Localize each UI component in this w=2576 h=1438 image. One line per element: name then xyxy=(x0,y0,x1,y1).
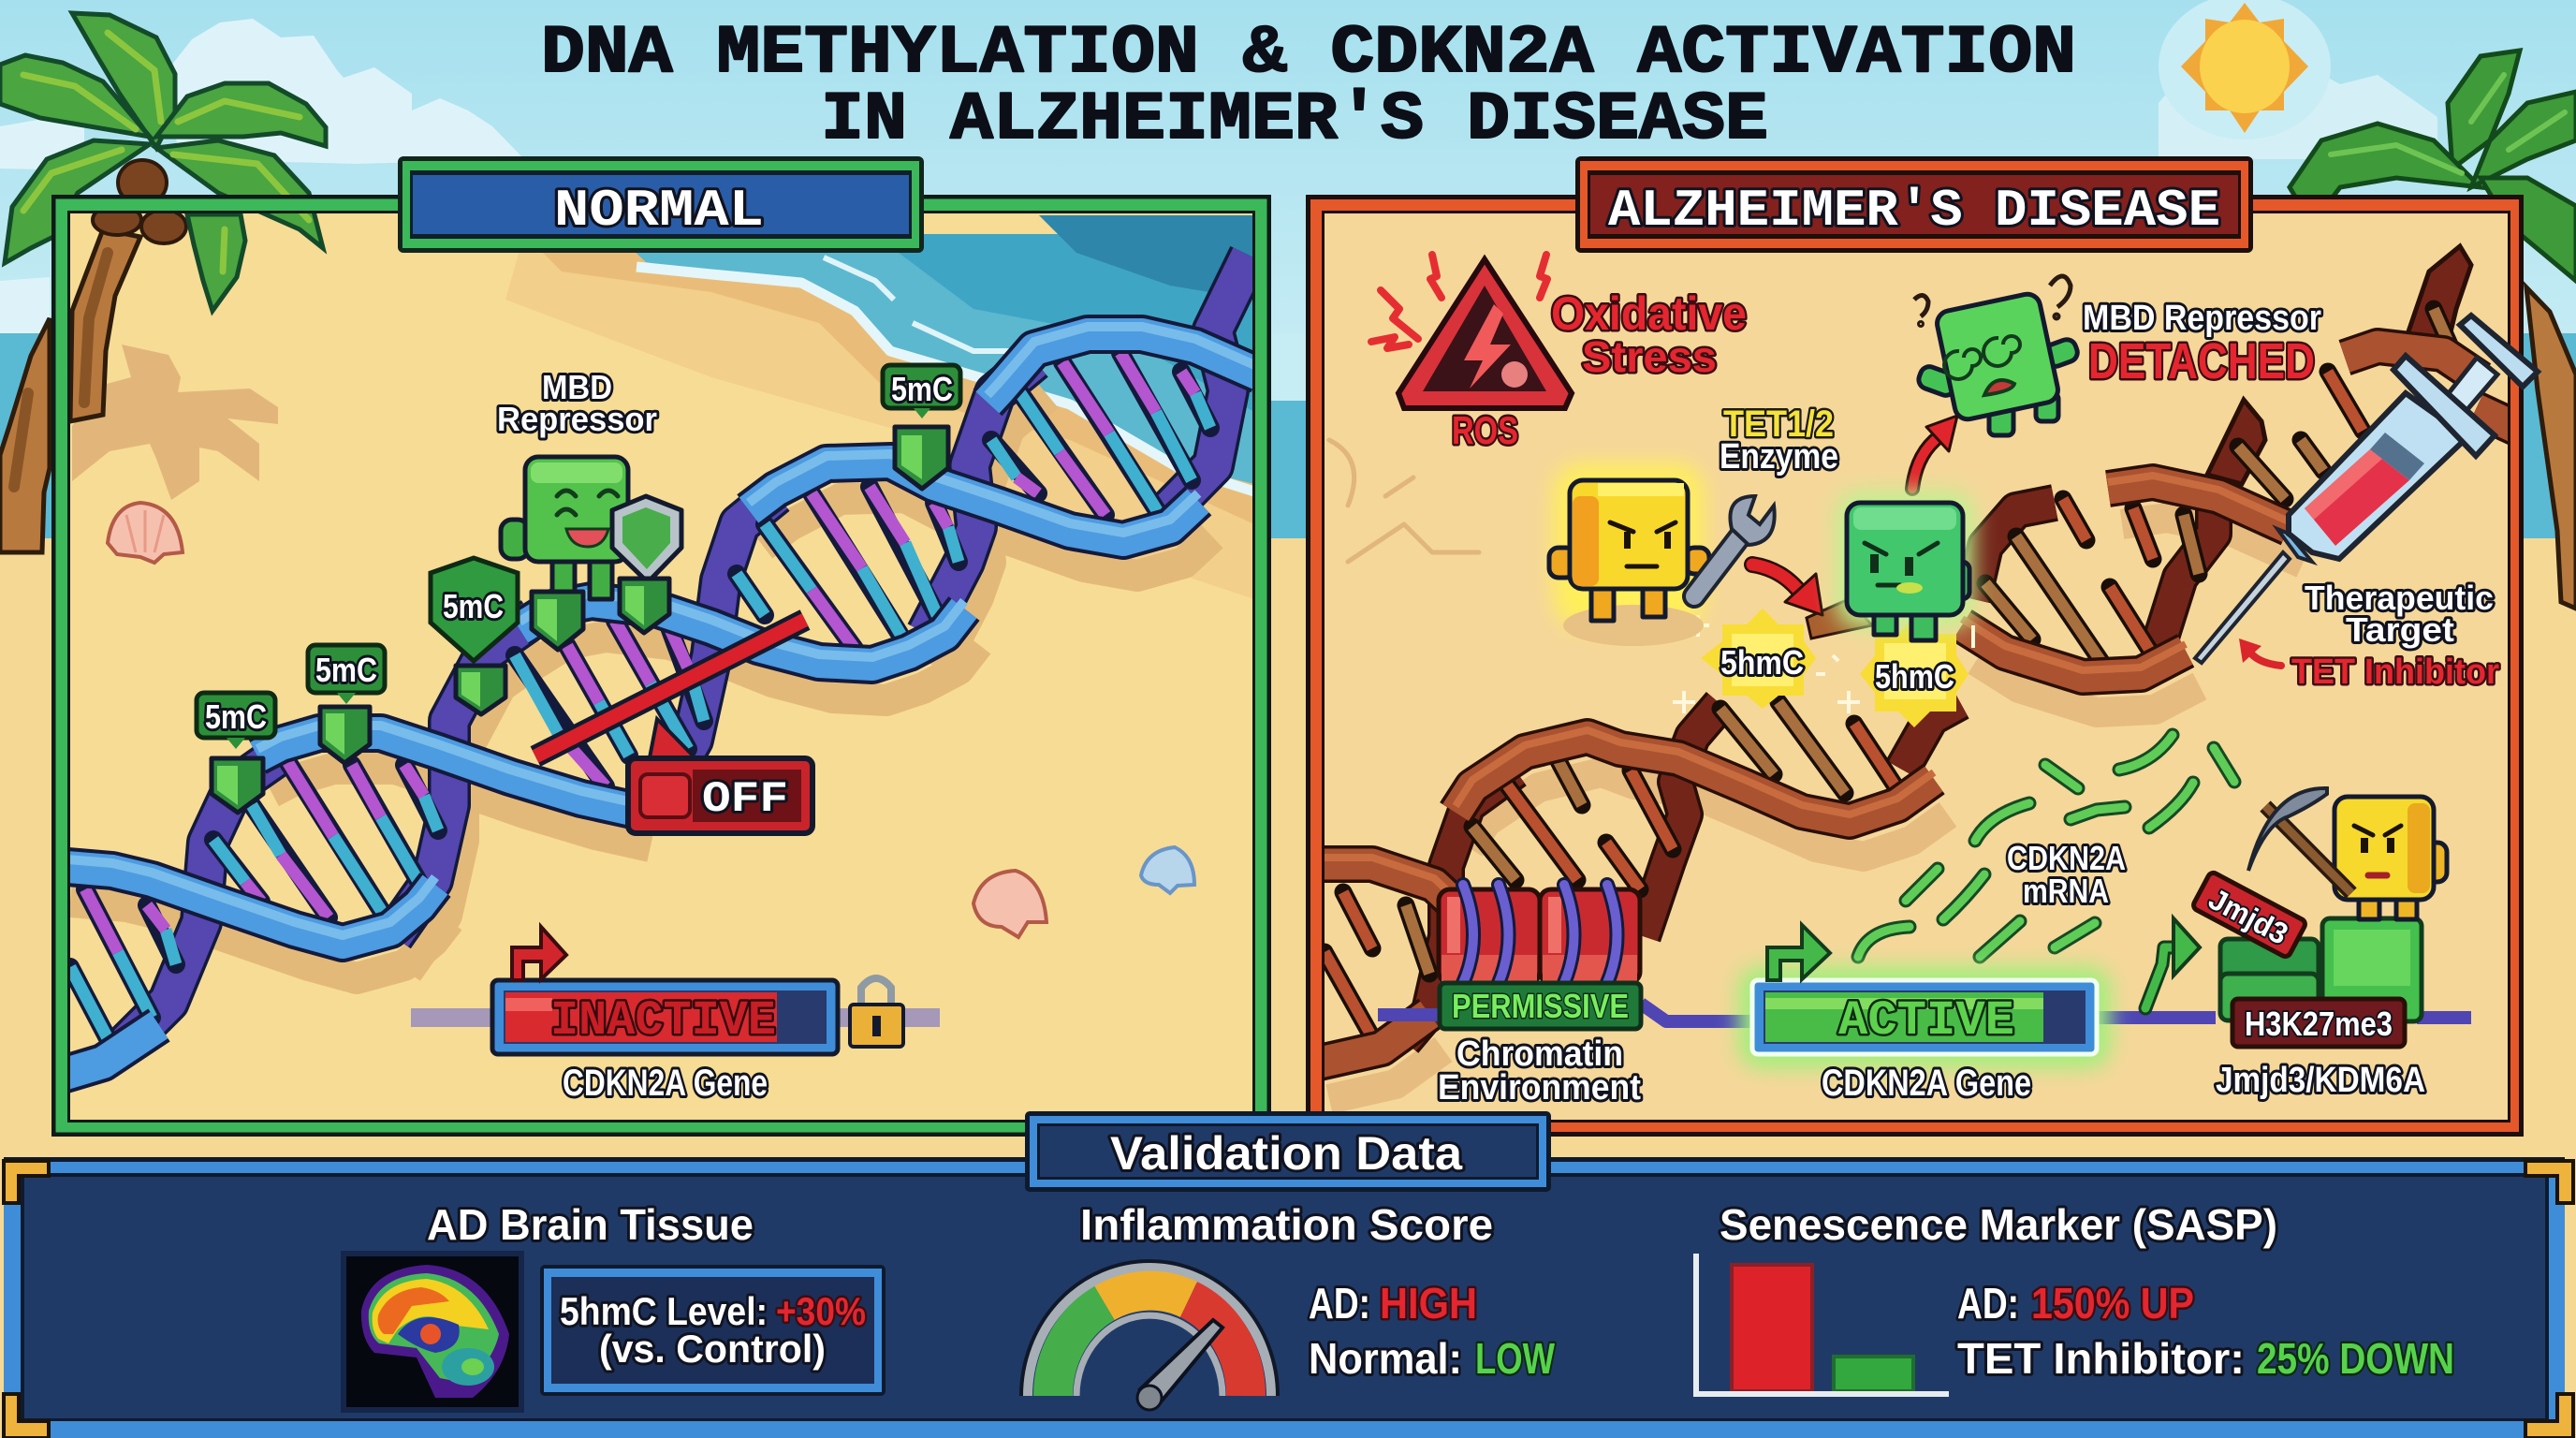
heading: AD Brain Tissue: AD Brain Tissue xyxy=(427,1200,754,1249)
warning: ROS triangle xyxy=(1371,255,1572,408)
title: IN ALZHEIMER'S DISEASE xyxy=(821,81,1768,158)
callout: 5hmC level xyxy=(540,1265,886,1396)
damaged dna: spikes xyxy=(2207,246,2471,484)
gauge: inflammation xyxy=(1025,1265,1274,1410)
label: MBD Repressor detached: MBD Repressor xyxy=(2083,299,2321,338)
panel: validation data xyxy=(4,1111,2573,1438)
label: Therapeutic Target TET Inhibitor xyxy=(2291,579,2499,692)
tag: 5mC shield large xyxy=(431,558,518,661)
title xyxy=(541,15,2076,158)
gene: CDKN2A inactive: INACTIVE xyxy=(550,993,776,1049)
label: Oxidative Stress: Stress xyxy=(1582,332,1717,381)
gene: CDKN2A active: ACTIVE xyxy=(1838,993,2014,1049)
label: 5hmC right: 5hmC xyxy=(1875,657,1954,696)
text: SASP values: AD: xyxy=(1957,1279,2019,1328)
arrow: up to detached repressor xyxy=(1912,416,1957,489)
label: MBD Repressor xyxy=(497,368,657,438)
callout: 5hmC level: 5hmC Level: xyxy=(560,1289,768,1333)
tag: 5mC left xyxy=(197,693,275,749)
label: ROS: ROS xyxy=(1452,408,1518,452)
character: Jmjd3 with pickaxe xyxy=(2248,788,2447,919)
damaged dna: back strands xyxy=(1404,496,2214,1041)
label: MBD Repressor detached xyxy=(2083,299,2321,389)
label: 5hmC left: 5hmC xyxy=(1720,643,1804,682)
arrow: inactive promoter xyxy=(512,927,566,980)
tag: normal: NORMAL xyxy=(554,181,764,241)
dna shadow xyxy=(70,396,1212,978)
gene: CDKN2A active xyxy=(1739,967,2110,1067)
tag: 5mC middle: 5mC xyxy=(315,651,377,689)
label: MBD Repressor: MBD xyxy=(542,368,612,406)
purple chromatin line xyxy=(1378,1004,2471,1021)
arrow: curved red to strand xyxy=(1752,565,1822,615)
text: SASP values: TET Inhibitor: xyxy=(1957,1334,2245,1383)
right palm tree xyxy=(2290,51,2576,609)
arrow: points at needle xyxy=(2239,638,2281,666)
gene: CDKN2A inactive xyxy=(411,980,940,1054)
mRNA strands xyxy=(1858,735,2234,957)
dna shadow xyxy=(1329,518,2303,1099)
tag: alzheimer's disease: ALZHEIMER'S DISEASE xyxy=(1608,181,2220,241)
label: Therapeutic Target TET Inhibitor: TET Inhibitor xyxy=(2291,653,2499,692)
label: Chromatin Environment: Chromatin xyxy=(1456,1034,1623,1074)
icon: star 5hmC left xyxy=(1701,609,1816,709)
text: inflammation values xyxy=(1309,1279,1555,1383)
dna helix: rungs xyxy=(70,353,1210,1058)
damaged dna: rungs xyxy=(1325,309,2452,1046)
label: Oxidative Stress xyxy=(1551,287,1747,381)
tag: validation data xyxy=(1025,1111,1551,1192)
label: TET1/2 Enzyme: Enzyme xyxy=(1720,437,1838,477)
callout: OFF switch: OFF xyxy=(702,775,788,824)
label: Chromatin Environment xyxy=(1438,1034,1641,1108)
callout: 5hmC level: (vs. Control) xyxy=(599,1327,826,1371)
label: CDKN2A Gene: CDKN2A Gene xyxy=(563,1063,768,1104)
tag: 5mC top right xyxy=(883,365,960,418)
label: MBD Repressor detached: DETACHED xyxy=(2088,333,2315,389)
tag: 5mC shield large: 5mC xyxy=(443,587,504,625)
tag: validation data: Validation Data xyxy=(1110,1127,1463,1180)
sand cracks xyxy=(1329,440,1479,562)
icon: star 5hmC right xyxy=(1860,618,1969,727)
bar chart: SASP xyxy=(1696,1254,1949,1394)
panel frame xyxy=(54,197,1269,1135)
icons: question marks xyxy=(1914,276,2071,326)
icon: padlock xyxy=(850,978,903,1047)
dna helix: back strands xyxy=(126,256,1250,1044)
damaged dna: front strands xyxy=(1315,346,2518,1064)
label: Therapeutic Target TET Inhibitor: Target xyxy=(2346,610,2454,649)
title: DNA METHYLATION & CDKN2A ACTIVATION xyxy=(541,15,2076,92)
heading: Inflammation Score: Inflammation Score xyxy=(1080,1200,1493,1249)
dna helix: front strands xyxy=(56,334,1259,1077)
icon: seashell pink lower xyxy=(973,871,1046,937)
icon: shield right xyxy=(895,427,948,489)
label: CDKN2A mRNA: CDKN2A xyxy=(2007,839,2126,877)
nucleosome xyxy=(1439,885,1640,983)
callout: 5hmC level: +30% xyxy=(776,1289,866,1333)
text: inflammation values: Normal: xyxy=(1309,1334,1462,1383)
icon: red blocking bar xyxy=(535,620,805,756)
label: Chromatin Environment: Environment xyxy=(1438,1068,1641,1108)
label: CDKN2A mRNA: mRNA xyxy=(2023,872,2109,910)
tag: H3K27me3: H3K27me3 xyxy=(2245,1005,2393,1043)
text: SASP values: 150% UP xyxy=(2031,1279,2194,1328)
heading: Senescence Marker: Senescence Marker (SASP) xyxy=(1720,1200,2277,1249)
character: TET enzyme with wrench xyxy=(1549,463,1775,646)
panel sand xyxy=(56,199,1266,1132)
icon: seashell pink xyxy=(108,503,183,563)
arrow: active promoter xyxy=(1767,925,1830,980)
label: TET1/2 Enzyme: TET1/2 xyxy=(1723,404,1834,445)
tag: alzheimer's disease xyxy=(1575,156,2253,253)
text: SASP values: 25% DOWN xyxy=(2257,1334,2454,1383)
left palm tree xyxy=(0,13,326,552)
panel frame xyxy=(1306,195,2524,1137)
label: Oxidative Stress: Oxidative xyxy=(1551,287,1747,340)
label: TET1/2 Enzyme xyxy=(1720,404,1838,477)
label: Jmjd3/KDM6A: Jmjd3/KDM6A xyxy=(2216,1061,2425,1100)
tag: 5mC middle xyxy=(308,645,385,704)
label: MBD Repressor: Repressor xyxy=(497,400,657,438)
icon: shields on strand xyxy=(212,579,669,813)
tag: normal xyxy=(398,156,924,253)
sun xyxy=(2159,0,2331,139)
character: active green repressor xyxy=(1837,492,1973,640)
right panel: alzheimer's disease xyxy=(1306,195,2538,1137)
label: Therapeutic Target TET Inhibitor: Therapeutic xyxy=(2305,579,2494,617)
clouds right xyxy=(2159,58,2437,159)
icon: syringe xyxy=(2195,315,2538,663)
label: CDKN2A Gene: CDKN2A Gene xyxy=(1822,1063,2031,1104)
label: CDKN2A mRNA xyxy=(2007,839,2126,910)
character: detached MBD repressor xyxy=(1916,292,2080,435)
clouds xyxy=(0,19,524,333)
beach and sea xyxy=(72,215,1254,599)
arrow: demethylase activation xyxy=(2145,918,2200,1008)
panel frame xyxy=(4,1157,2565,1438)
text: inflammation values: HIGH xyxy=(1380,1279,1477,1328)
icon: seashell blue xyxy=(1141,847,1194,893)
tag: permissive: PERMISSIVE xyxy=(1452,987,1629,1025)
text: inflammation values: AD: xyxy=(1309,1279,1370,1328)
character: MBD repressor with shield xyxy=(501,457,681,599)
callout: OFF switch xyxy=(628,719,812,833)
tag: 5mC top right: 5mC xyxy=(891,370,953,408)
gold corners xyxy=(4,1161,2573,1438)
histone blocks xyxy=(2220,918,2422,1021)
left panel: normal xyxy=(0,13,1269,1135)
text: inflammation values: LOW xyxy=(1475,1334,1555,1383)
strand stub by repressor xyxy=(1807,599,1872,638)
text: SASP values xyxy=(1957,1279,2454,1383)
tag: 5mC left: 5mC xyxy=(205,697,267,736)
icon: brain scan xyxy=(344,1254,521,1410)
tag: Jmjd3: Jmjd3 xyxy=(2203,882,2293,951)
icon: shield highlights xyxy=(217,586,644,805)
sparkles xyxy=(1673,615,1973,713)
tag: Jmjd3 xyxy=(2191,871,2307,959)
